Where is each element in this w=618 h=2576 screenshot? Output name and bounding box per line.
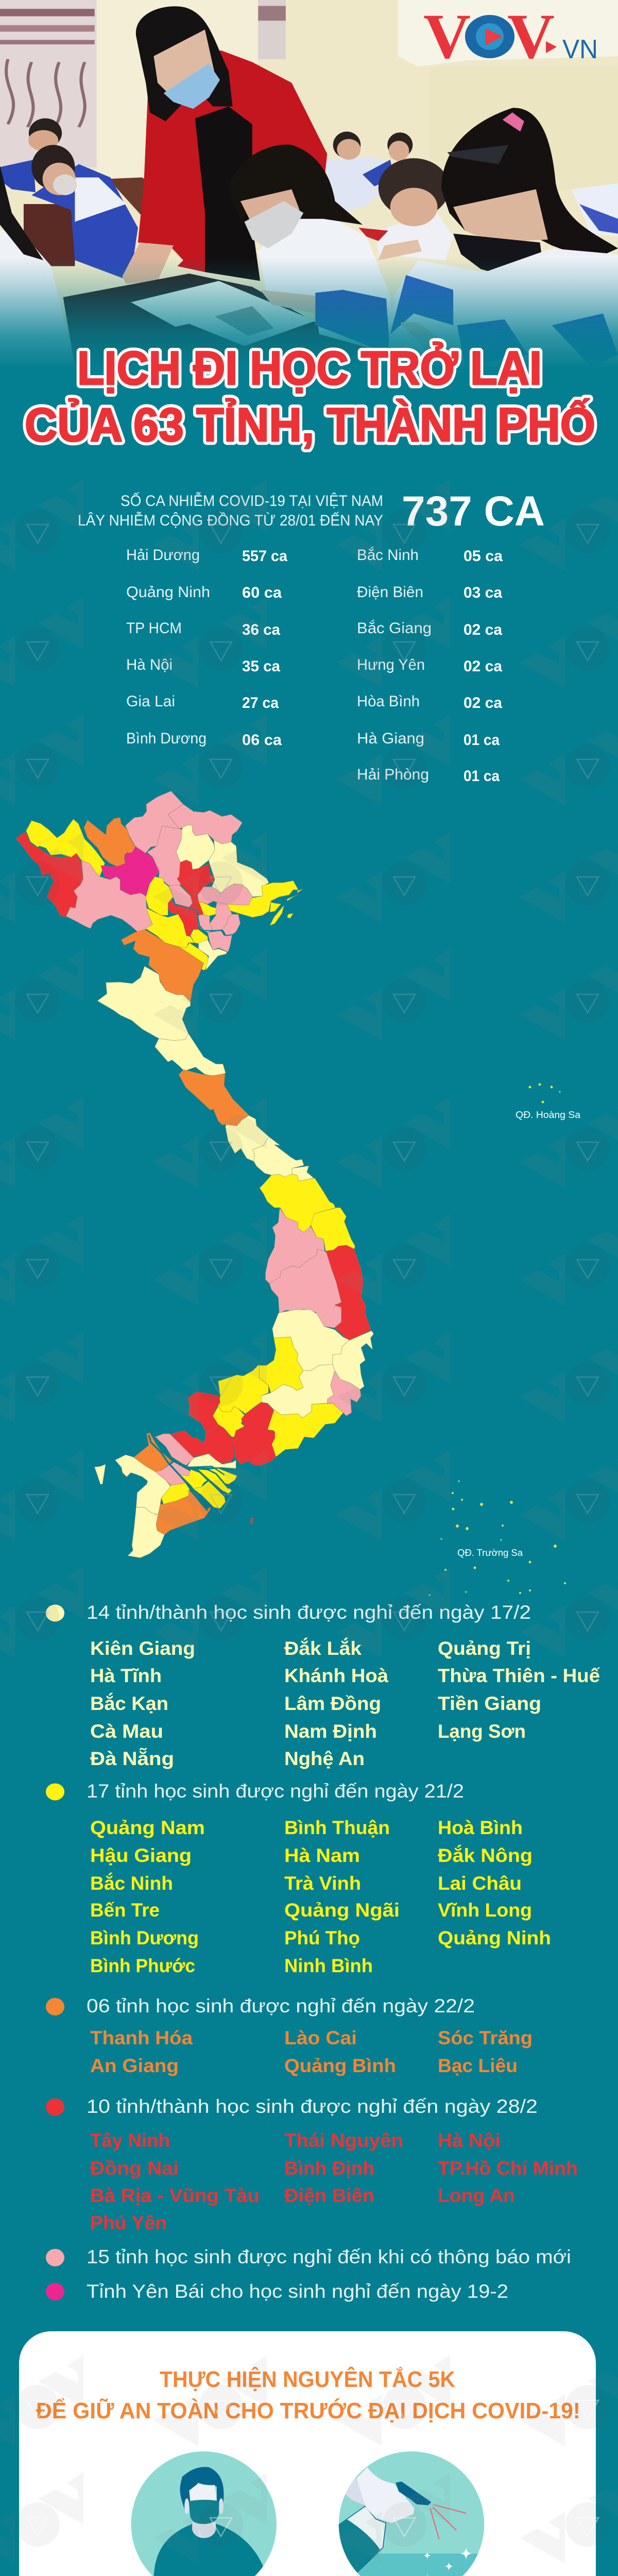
panel: 5K rules — [19, 2331, 596, 2576]
legend group: 14 provinces until 17/2 — [46, 1602, 600, 1769]
case list: left column: Hải Dương — [126, 547, 200, 564]
legend group: 17 provinces until 21/2: Hoà Bình — [438, 1817, 523, 1838]
legend group: 17 provinces until 21/2: Bình Dương — [90, 1927, 199, 1948]
legend group: 10 provinces until 28/2: Hà Nội — [438, 2130, 501, 2151]
legend group: 10 provinces until 28/2: Bình Định — [284, 2158, 374, 2179]
legend: 15 provinces until further notice: 15 tỉnh học sinh được nghỉ đến khi có thông báo mới — [87, 2246, 571, 2267]
case list: right column: Hải Phòng — [357, 766, 429, 783]
legend group: 17 provinces until 21/2: Bắc Ninh — [90, 1872, 173, 1894]
legend group: 14 provinces until 17/2: Quảng Trị — [438, 1638, 531, 1659]
legend group: 6 provinces until 22/2 — [46, 1995, 533, 2076]
case list: right column: Bắc Ninh — [357, 547, 419, 564]
title: LỊCH ĐI HỌC TRỞ LẠI — [77, 342, 542, 395]
map of Vietnam: south — [94, 1310, 374, 1558]
case list: left column: 557 ca — [242, 548, 287, 565]
panel heading: ĐỂ GIỮ AN TOÀN CHO TRƯỚC ĐẠI DỊCH COVID-19! — [36, 2397, 580, 2424]
legend group: 14 provinces until 17/2: Cà Mau — [90, 1721, 163, 1742]
legend group: 17 provinces until 21/2: Hậu Giang — [90, 1845, 192, 1866]
case list: right column: Hưng Yên — [357, 656, 425, 673]
icon: face mask — [131, 2451, 277, 2576]
watermark pattern: 5K panel — [0, 2355, 618, 2576]
legend group: 6 provinces until 22/2: Quảng Bình — [284, 2055, 396, 2076]
legend group: 17 provinces until 21/2: Đắk Nông — [438, 1844, 533, 1866]
legend group: 6 provinces until 22/2: Bạc Liêu — [438, 2055, 518, 2076]
case list: right column: 01 ca — [464, 768, 500, 785]
logo: VOV.VN: V — [423, 1, 471, 72]
legend group: 10 provinces until 28/2 — [46, 2096, 578, 2233]
legend group: 10 provinces until 28/2: 10 tỉnh/thành học sinh được nghỉ đến ngày 28/2 — [87, 2096, 538, 2117]
title: CỦA 63 TỈNH, THÀNH PHỐ — [25, 398, 595, 451]
watermark pattern: map section upper — [0, 479, 618, 1067]
case list: right column — [357, 547, 503, 785]
islands: Hoàng Sa — [528, 1083, 560, 1104]
legend group: 17 provinces until 21/2: Trà Vinh — [284, 1873, 361, 1894]
case list: left column: 36 ca — [242, 621, 280, 638]
legend group: 17 provinces until 21/2: Lai Châu — [438, 1873, 522, 1894]
center girl — [258, 218, 391, 348]
case list: right column: Điện Biên — [357, 584, 423, 601]
panel heading — [36, 2366, 580, 2424]
legend group: 17 provinces until 21/2: Bình Thuận — [284, 1817, 390, 1838]
legend group: 6 provinces until 22/2: An Giang — [90, 2055, 179, 2076]
legend group: 6 provinces until 22/2: Lào Cai — [284, 2027, 357, 2048]
legend group: 6 provinces until 22/2: Thanh Hóa — [90, 2027, 193, 2048]
legend group: 17 provinces until 21/2: Ninh Bình — [284, 1955, 373, 1976]
legend group: 14 provinces until 17/2: Tiền Giang — [438, 1693, 541, 1714]
legend group: 17 provinces until 21/2: Vĩnh Long — [438, 1900, 532, 1921]
legend group: 10 provinces until 28/2: Đồng Nai — [90, 2158, 179, 2179]
legend: Yên Bái until 19/2: Tỉnh Yên Bái cho học sinh nghỉ đến ngày 19-2 — [87, 2281, 508, 2302]
label: Hoàng Sa: QĐ. Hoàng Sa — [516, 1110, 581, 1120]
case list: left column: Hà Nội — [126, 656, 173, 673]
case list: right column: 01 ca — [464, 732, 500, 749]
legend group: 17 provinces until 21/2: Phú Thọ — [284, 1927, 360, 1948]
stats heading — [78, 492, 383, 529]
title: CỦA 63 TỈNH, THÀNH PHỐ — [25, 398, 595, 451]
case list: left column: Bình Dương — [126, 730, 207, 747]
legend group: 17 provinces until 21/2: Quảng Nam — [90, 1817, 205, 1838]
legend group: 14 provinces until 17/2: Hà Tĩnh — [90, 1665, 162, 1686]
title — [25, 342, 595, 451]
icon: disinfectant spray — [338, 2451, 485, 2576]
logo: VOV.VN: V — [507, 1, 555, 72]
legend group: 10 provinces until 28/2: TP.Hồ Chí Minh — [438, 2158, 578, 2179]
case list: right column: Hòa Bình — [357, 693, 420, 710]
legend group: 10 provinces until 28/2: Điện Biên — [284, 2185, 374, 2206]
legend group: 14 provinces until 17/2: Bắc Kạn — [90, 1692, 168, 1714]
total cases: 737 CA — [402, 488, 545, 535]
legend group: 14 provinces until 17/2: 14 tỉnh/thành học sinh được nghỉ đến ngày 17/2 — [87, 1602, 531, 1623]
case list: left column: Gia Lai — [126, 693, 175, 710]
legend group: 14 provinces until 17/2: Nghệ An — [284, 1748, 365, 1769]
case list: left column: Quảng Ninh — [126, 584, 210, 601]
photo fade into teal — [0, 258, 618, 368]
legend group: 14 provinces until 17/2: Kiên Giang — [90, 1638, 195, 1659]
legend group: 10 provinces until 28/2: Long An — [438, 2185, 515, 2206]
legend group: 14 provinces until 17/2: Lạng Sơn — [438, 1721, 526, 1742]
legend group: 14 provinces until 17/2: Đà Nẵng — [90, 1748, 174, 1769]
map of Vietnam: north — [16, 791, 303, 1076]
stats heading: SỐ CA NHIỄM COVID-19 TẠI VIỆT NAM — [121, 492, 383, 510]
legend group: 6 provinces until 22/2: 06 tỉnh học sinh được nghỉ đến ngày 22/2 — [87, 1995, 475, 2016]
legend group: 14 provinces until 17/2: Đắk Lắk — [284, 1637, 362, 1659]
legend group: 14 provinces until 17/2: Khánh Hoà — [284, 1665, 388, 1686]
legend group: 10 provinces until 28/2: Thái Nguyên — [284, 2130, 403, 2151]
logo: VOV.VN — [423, 1, 598, 72]
legend group: 14 provinces until 17/2: Nam Định — [284, 1721, 377, 1742]
case list: left column: 06 ca — [242, 732, 282, 749]
panel heading: THỰC HIỆN NGUYÊN TẮC 5K — [160, 2366, 455, 2392]
title: LỊCH ĐI HỌC TRỞ LẠI — [77, 342, 542, 395]
legend group: 14 provinces until 17/2: Thừa Thiên - Huế — [438, 1665, 600, 1686]
case list: left column: 60 ca — [242, 584, 282, 601]
legend group: 10 provinces until 28/2: Tây Ninh — [90, 2130, 170, 2151]
right girl — [441, 108, 618, 260]
teacher — [138, 50, 327, 272]
logo: VOV.VN: VN — [562, 35, 598, 64]
case list: left column — [126, 547, 287, 749]
desk — [63, 274, 369, 362]
islands: Trường Sa — [428, 1481, 566, 1596]
watermark pattern: map section lower — [0, 1097, 618, 1655]
legend group: 14 provinces until 17/2: Lâm Đồng — [284, 1693, 381, 1714]
case list: right column: 02 ca — [464, 621, 502, 638]
legend group: 17 provinces until 21/2: Bến Tre — [90, 1900, 160, 1921]
legend group: 17 provinces until 21/2: Bình Phước — [90, 1955, 195, 1976]
map of Vietnam: central — [179, 1070, 371, 1341]
case list: right column: 03 ca — [464, 584, 502, 601]
case list: right column: Hà Giang — [357, 730, 424, 747]
legend group: 10 provinces until 28/2: Bà Rịa - Vũng Tàu — [90, 2185, 260, 2206]
legend group: 17 provinces until 21/2: Hà Nam — [284, 1845, 360, 1866]
legend group: 10 provinces until 28/2: Phú Yên — [90, 2212, 167, 2233]
legend group: 17 provinces until 21/2: Quảng Ngãi — [284, 1900, 400, 1921]
case list: right column: 02 ca — [464, 658, 502, 675]
case list: right column: 05 ca — [464, 548, 503, 565]
case list: left column: TP HCM — [126, 620, 182, 637]
legend group: 17 provinces until 21/2: Quảng Ninh — [438, 1927, 551, 1948]
label: Trường Sa: QĐ. Trường Sa — [457, 1548, 523, 1558]
legend group: 6 provinces until 22/2: Sóc Trăng — [438, 2027, 533, 2048]
legend group: 17 provinces until 21/2 — [46, 1781, 551, 1976]
case list: left column: 27 ca — [242, 694, 279, 711]
legend group: 17 provinces until 21/2: 17 tỉnh học sinh được nghỉ đến ngày 21/2 — [87, 1781, 464, 1802]
header photo: teacher and students in classroom — [0, 0, 618, 367]
stats heading: LÂY NHIỄM CỘNG ĐỒNG TỪ 28/01 ĐẾN NAY — [78, 512, 383, 529]
case list: left column: 35 ca — [242, 658, 280, 675]
case list: right column: 02 ca — [464, 694, 502, 711]
case list: right column: Bắc Giang — [357, 620, 432, 637]
